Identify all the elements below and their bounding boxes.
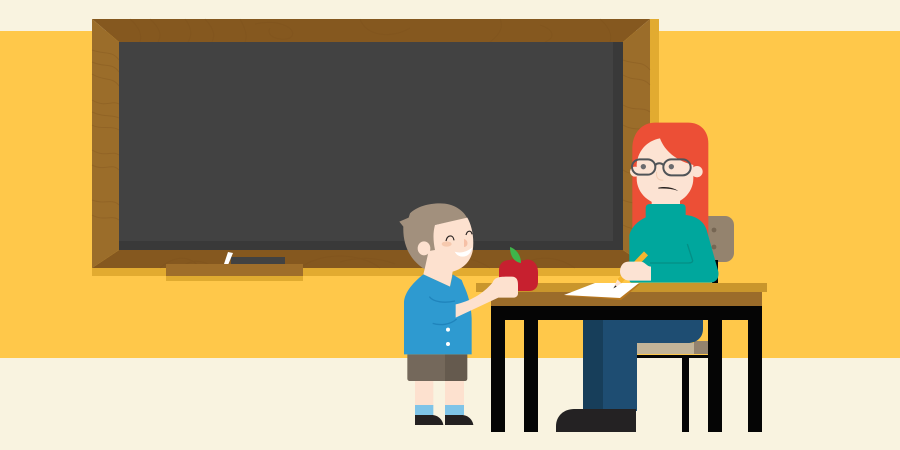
teacher hair [632,123,708,243]
boy eyes [446,231,472,241]
teacher ears [630,166,703,177]
sweater arm fold [650,244,693,263]
chair seat and leg [637,341,708,432]
boy face and neck [423,218,473,287]
boy cheek [442,241,452,247]
paper [564,283,640,300]
boy nose [464,239,467,247]
frame shadow [92,19,659,276]
wooden frame [92,19,650,268]
teacher shoe [556,409,636,432]
boy [399,203,518,425]
teacher eyes [641,164,674,169]
teacher glasses [632,159,691,175]
boy arm and hand [456,277,518,318]
boy legs [415,380,464,406]
eraser [231,257,285,264]
boy shoes [415,415,473,425]
desk frame and legs [491,306,762,432]
boy ear [418,241,430,255]
boy hair [399,203,467,269]
boy smile [455,248,472,257]
desk top [476,283,767,306]
teacher legs [583,318,703,411]
apple leaf [510,247,521,263]
teacher mouth [658,187,678,191]
pencil [613,251,648,288]
boy shorts [407,354,467,381]
teacher hand [620,262,651,281]
apple [499,247,538,291]
chair back [690,216,734,284]
teacher face [637,138,693,205]
board surface [119,42,623,250]
teacher nose [657,172,663,180]
boy shirt [404,274,472,354]
teacher sweater [629,204,719,283]
chalk [224,252,233,265]
chalk ledge [166,264,303,281]
teacher [556,123,719,432]
teacher neck [652,193,680,210]
chalkboard [92,19,659,281]
boy socks [415,405,464,415]
desk [476,283,767,432]
